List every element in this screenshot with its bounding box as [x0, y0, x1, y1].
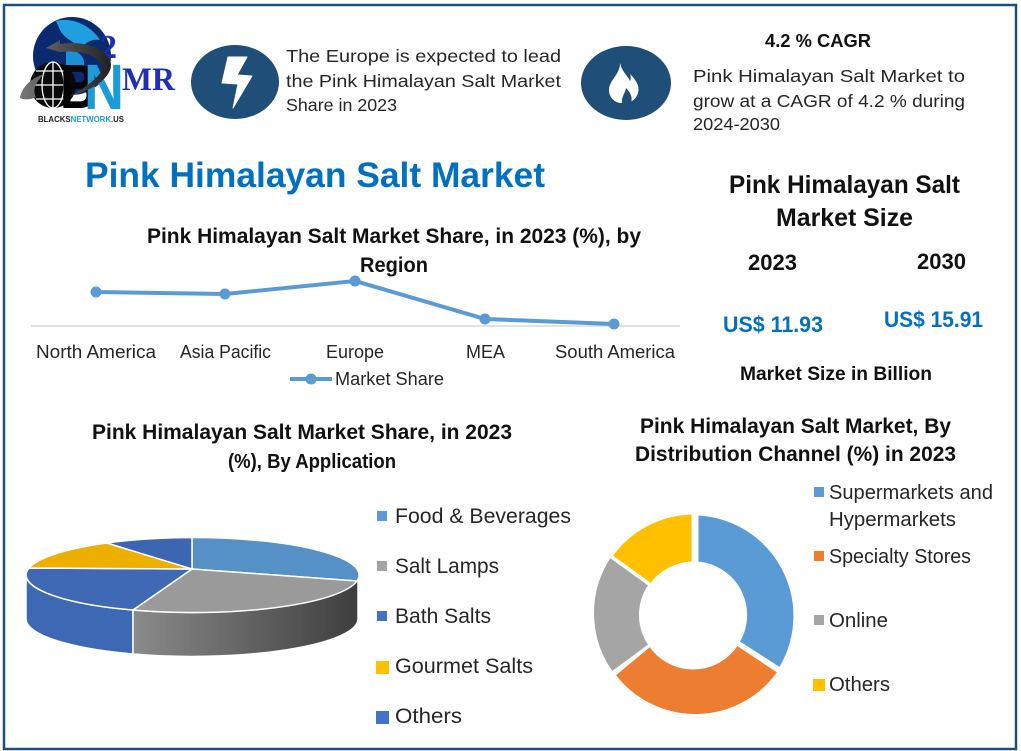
callout: Europe lead: the Pink Himalayan Salt Market: [286, 71, 561, 91]
slice: food and beverages: [192, 537, 359, 581]
slice: bath salts: [26, 568, 192, 610]
legend: supermarkets: Supermarkets and: [829, 482, 993, 504]
pie side: blue: [26, 575, 133, 654]
market share line: [96, 281, 614, 324]
callout: Europe lead: Share in 2023: [286, 95, 397, 115]
callout: CAGR text: [693, 66, 965, 134]
legend: online: Online: [829, 610, 888, 632]
market size 2030: 2030: [917, 249, 966, 274]
slice: gourmet salts: [29, 543, 192, 569]
legend: bath salts: Bath Salts: [395, 605, 491, 628]
slice: others: [611, 513, 693, 585]
axis labels: North America: [36, 342, 157, 362]
icon: lightning bolt: [191, 45, 279, 119]
line chart heading: Pink Himalayan Salt Market Share, in 2023 (%), by: [147, 225, 641, 248]
donut legend: [813, 482, 993, 696]
application heading: [92, 421, 512, 473]
legend: gourmet salts: Gourmet Salts: [395, 655, 533, 678]
legend: Market Share: [335, 369, 444, 389]
callout: CAGR text: Pink Himalayan Salt Market to: [693, 66, 965, 86]
market size 2023: 2023: [748, 250, 797, 275]
axis labels: South America: [555, 342, 676, 362]
market size heading: [729, 171, 961, 232]
icon: flame: [581, 46, 671, 120]
pie legend: [376, 505, 571, 728]
distribution heading: Distribution Channel (%) in 2023: [635, 443, 956, 466]
legend: food and beverages: Food & Beverages: [395, 505, 571, 528]
slice: salt lamps: [133, 569, 357, 613]
line chart heading: [147, 225, 641, 277]
application heading: Pink Himalayan Salt Market Share, in 2023: [92, 421, 512, 444]
market size note: Market Size in Billion: [740, 364, 932, 385]
logo: [20, 17, 176, 124]
logo swoosh: [20, 40, 111, 99]
axis labels: [36, 342, 676, 362]
callout: Europe lead: [286, 46, 561, 115]
callout: CAGR text: grow at a CAGR of 4.2 % during: [693, 91, 965, 111]
logo numeral: 2: [100, 29, 117, 66]
legend: others: Others: [395, 705, 462, 728]
distribution heading: [635, 415, 956, 466]
market size heading: Pink Himalayan Salt: [729, 171, 961, 199]
data points: [90, 276, 620, 330]
market size heading: Market Size: [776, 204, 913, 232]
title: Pink Himalayan Salt Market: [85, 156, 545, 195]
pie side: gray: [133, 575, 358, 656]
donut chart: distribution: [593, 513, 795, 716]
logo caption: BLACKSNETWORK.US: [38, 115, 125, 124]
slice: others: [107, 538, 192, 569]
distribution heading: Pink Himalayan Salt Market, By: [640, 415, 951, 438]
callout: Europe lead: The Europe is expected to lead: [286, 46, 561, 66]
legend: specialty stores: Specialty Stores: [829, 546, 971, 568]
market size 2023: [723, 250, 823, 337]
line chart heading: Region: [360, 254, 428, 277]
legend: others: Others: [829, 674, 890, 696]
legend: supermarkets: Hypermarkets: [829, 509, 956, 531]
callout: CAGR text: 2024-2030: [693, 114, 780, 134]
callout: CAGR heading: 4.2 % CAGR: [765, 31, 871, 51]
logo black globe: [30, 62, 76, 108]
logo MR: MR: [122, 62, 176, 98]
market size 2023: US$ 11.93: [723, 312, 823, 337]
market size 2030: US$ 15.91: [884, 307, 983, 332]
axis labels: Europe: [326, 342, 384, 362]
slice: supermarkets: [697, 514, 795, 669]
axis labels: MEA: [466, 342, 505, 362]
logo letter B: B: [60, 53, 96, 122]
axis labels: Asia Pacific: [180, 342, 271, 362]
slice: online: [593, 556, 650, 673]
application heading: (%), By Application: [228, 451, 396, 473]
legend: salt lamps: Salt Lamps: [395, 555, 499, 578]
pie chart: application: [26, 537, 359, 656]
logo letter N: N: [84, 51, 124, 123]
legend: supermarkets: [814, 482, 993, 531]
line chart: [31, 276, 680, 389]
logo globe: [33, 17, 111, 95]
market size 2030: [884, 249, 983, 332]
slice: specialty stores: [614, 644, 779, 716]
